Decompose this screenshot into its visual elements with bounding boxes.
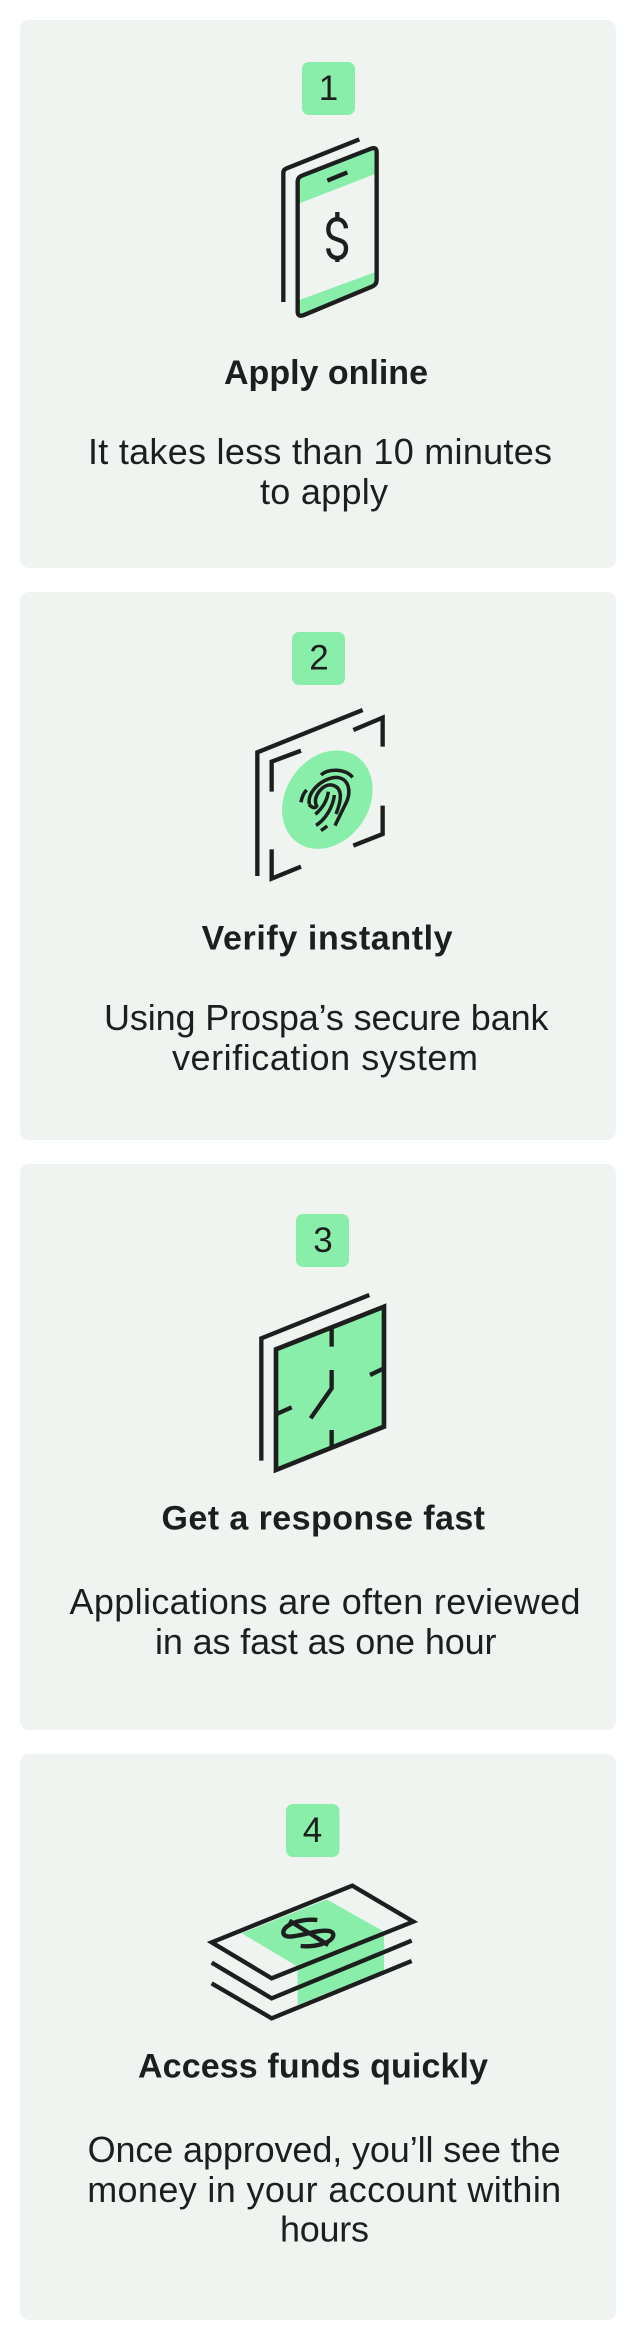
text: response description: Applications are often reviewed: [70, 1581, 580, 1622]
text: funds description: hours: [280, 2208, 369, 2250]
text: apply description: It takes less than 10 minutes: [88, 431, 552, 472]
text: verify description: Using Prospa’s secure bank: [104, 997, 550, 1038]
badge: number 1: 1: [319, 69, 338, 108]
icon: fingerprint scan: [257, 710, 391, 879]
badge: number 3: 3: [313, 1221, 333, 1260]
panel: step 2 verify instantly: [20, 592, 616, 1140]
text: apply description: [88, 431, 552, 512]
badge: number 4: [286, 1804, 340, 1857]
text: response description: [70, 1581, 580, 1662]
heading: apply online: Apply online: [224, 354, 428, 392]
icon: stack of banknotes: [212, 1886, 413, 2018]
icon: phone with dollar sign: [283, 139, 377, 316]
badge: number 4: 4: [303, 1811, 322, 1850]
badge: number 2: 2: [309, 638, 329, 678]
text: funds description: Once approved, you’ll see the: [88, 2129, 561, 2170]
heading: get a response fast: Get a response fast: [162, 1500, 485, 1538]
text: funds description: [87, 2129, 561, 2250]
text: verify description: [104, 997, 550, 1078]
text: apply description: to apply: [260, 471, 388, 512]
icon: square clock: [261, 1295, 384, 1470]
panel: step 4 access funds quickly: [20, 1754, 616, 2320]
text: verify description: verification system: [172, 1037, 478, 1078]
badge: number 1: [302, 62, 355, 115]
panel: step 1 apply online: [20, 20, 616, 568]
heading: verify instantly: Verify instantly: [202, 920, 453, 958]
heading: access funds quickly: Access funds quickly: [138, 2048, 488, 2086]
text: funds description: money in your account within: [87, 2169, 561, 2210]
badge: number 2: [292, 632, 345, 685]
text: response description: in as fast as one hour: [155, 1621, 496, 1662]
badge: number 3: [296, 1214, 349, 1267]
panel: step 3 get a response fast: [20, 1164, 616, 1730]
